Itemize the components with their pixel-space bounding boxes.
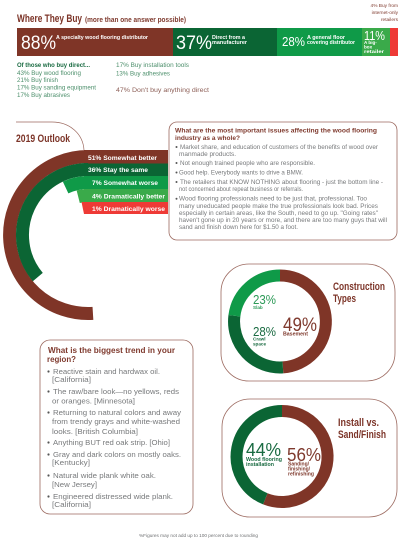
callout: 4% internet-only retailers xyxy=(371,3,399,23)
text block: trend list: Returning to natural colors and away xyxy=(53,408,181,417)
arc and label: 36% stay the same: 36% Stay the same xyxy=(88,167,148,174)
panel: biggest trend in your region xyxy=(40,340,193,514)
text block: trend list: Reactive stain and hardwax oil. xyxy=(53,367,160,376)
segment: 37% direct from manufacturer xyxy=(173,28,277,56)
heading: construction types: Types xyxy=(333,293,356,305)
stacked bar: where they buy xyxy=(17,28,398,56)
segment: 28% general floor covering distributor: A general floor xyxy=(307,35,345,41)
heading: issues question: industry as a whole? xyxy=(175,135,240,142)
segment: 37% direct from manufacturer: 37% xyxy=(176,33,212,54)
text block: of those who buy direct: 17% Buy abrasives xyxy=(17,93,70,99)
label: 56% sanding/finishing/refinishing xyxy=(287,445,321,478)
heading: install vs sand/finish: Sand/Finish xyxy=(338,429,386,441)
heading: issues question xyxy=(175,128,377,142)
label: 28% crawl space xyxy=(253,324,276,346)
arc and label: 4% dramatically better: 4% Dramatically better xyxy=(92,194,165,200)
heading: trend question: What is the biggest trend in your xyxy=(48,346,175,355)
segment: 11% big-box retailer: A big- xyxy=(364,40,377,45)
text block: issues list: manmade products. xyxy=(179,152,236,158)
text block: issues list: The retailers that KNOW NOTHING about flooring - just the bottom line - xyxy=(180,180,383,186)
text block: trend list: Gray and dark colors on mostly oaks. xyxy=(53,450,181,459)
text block: trend list: or oranges. [Minnesota] xyxy=(52,396,135,406)
arc and label: 1% dramatically worse: 1% Dramatically worse xyxy=(92,206,165,213)
title: where they buy: (more than one answer possible) xyxy=(85,15,186,24)
segment: 28% general floor covering distributor xyxy=(277,28,362,56)
label: 56% sanding/finishing/refinishing: Sanding/ xyxy=(288,462,310,468)
text block: trend list: from trendy grays and white-washed xyxy=(52,417,180,426)
segment: 11% big-box retailer: box xyxy=(364,44,373,50)
title: where they buy: Where They Buy xyxy=(17,13,83,25)
panel: install vs sand/finish xyxy=(222,399,397,517)
heading: install vs sand/finish: Install vs. xyxy=(338,417,379,429)
arc and label: 4% dramatically better xyxy=(78,189,168,202)
text block: of those who buy direct: 13% Buy adhesives xyxy=(116,72,170,78)
arc and label: 51% somewhat better xyxy=(10,150,168,313)
panel: most important issues xyxy=(169,122,397,240)
text block: trend list: [New Jersey] xyxy=(52,480,97,489)
arc and label: 51% somewhat better: 51% Somewhat better xyxy=(88,155,157,162)
text block: of those who buy direct: Of those who buy direct... xyxy=(17,63,90,69)
donut chart: install vs sand/finish xyxy=(237,411,328,502)
text block: issues list: Wood flooring professionals need to be just that, professional. Too xyxy=(179,197,368,203)
text: 47% don't buy direct: 47% Don't buy anything direct xyxy=(116,88,209,94)
segment: 11% big-box retailer xyxy=(362,28,390,56)
text block: issues list: Market share, and education of customers of the benefits of wood over xyxy=(180,145,378,151)
segment: 28% general floor covering distributor: 28% xyxy=(282,34,305,49)
segment: 11% big-box retailer: 11% xyxy=(364,28,385,43)
arc and label: 1% dramatically worse xyxy=(82,202,168,214)
text block: issues list: not concerned about repeat business or referrals. xyxy=(179,187,303,193)
segment: 37% direct from manufacturer: Direct from a xyxy=(212,35,245,41)
heading: issues question: What are the most important issues affecting the wood flooring xyxy=(175,128,377,134)
text block: issues list: Good help. Everybody wants to drive a BMW. xyxy=(179,170,303,176)
panel: construction types xyxy=(221,264,395,381)
callout: 4% internet-only retailers: retailers xyxy=(381,17,399,23)
segment: 28% general floor covering distributor: covering distributor xyxy=(307,40,355,46)
text block: issues list: haven't gone up in 20 years or more, and there are too many guys that will xyxy=(179,218,387,224)
text block: issues list: especially in certain areas, like the South, need to go up. "Going rates" xyxy=(179,211,378,217)
text block: trend list: Natural wide plank white oak. xyxy=(53,471,156,480)
label: 23% slab: 23% xyxy=(253,292,276,307)
footnote: %Figures may not add up to 100 percent due to rounding xyxy=(139,533,259,538)
arc and label: 7% somewhat worse: 7% Somewhat worse xyxy=(92,180,158,187)
text block: trend list: [California] xyxy=(52,375,91,384)
segment: 37% direct from manufacturer: manufacturer xyxy=(212,40,247,46)
heading: 2019 outlook xyxy=(16,122,84,150)
text block: of those who buy direct: 17% Buy sanding equipment xyxy=(17,86,96,92)
text block: trend list: Anything BUT red oak strip. [Ohio] xyxy=(53,438,170,447)
text block: issues list: many uneducated people make the true professionals look bad. Prices xyxy=(179,204,378,210)
text block: issues list: sand and finish down here for $1.50 a foot. xyxy=(179,225,298,231)
label: 49% basement: Basement xyxy=(283,332,308,338)
text block: trend list xyxy=(47,367,181,509)
text block: trend list: Engineered distressed wide plank. xyxy=(53,492,173,501)
label: 44% wood flooring installation: Wood flooring xyxy=(246,457,282,463)
segment: 11% big-box retailer: retailer xyxy=(364,49,384,54)
heading: 2019 outlook: 2019 Outlook xyxy=(16,133,71,145)
callout: 4% internet-only retailers: 4% Buy from xyxy=(371,3,398,9)
label: 56% sanding/finishing/refinishing: 56% xyxy=(287,445,321,465)
heading: trend question xyxy=(47,346,175,364)
heading: construction types xyxy=(333,281,385,305)
label: 23% slab: Slab xyxy=(253,305,263,310)
text block: trend list: [California] xyxy=(52,500,91,509)
label: 28% crawl space: 28% xyxy=(253,324,276,339)
text block: of those who buy direct: 17% Buy installation tools xyxy=(116,63,189,69)
label: 49% basement: 49% xyxy=(283,315,317,336)
callout: 4% internet-only retailers: internet-only xyxy=(372,10,399,16)
donut chart: construction types xyxy=(234,276,326,367)
text block: trend list: looks. [British Columbia] xyxy=(52,427,138,436)
arc and label: 7% somewhat worse xyxy=(66,176,168,189)
text block: issues list xyxy=(176,145,387,231)
segment: 88% specialty distributor: A specialty wood flooring distributor xyxy=(56,35,148,41)
heading: install vs sand/finish xyxy=(338,417,386,441)
text block: trend list: The raw/bare look—no yellows, reds xyxy=(53,387,179,396)
heading: construction types: Construction xyxy=(333,281,385,293)
segment: 88% specialty distributor xyxy=(17,28,173,56)
label: 28% crawl space: space xyxy=(253,342,266,346)
text block: of those who buy direct: 21% Buy finish xyxy=(17,78,58,84)
text block: issues list: Not enough trained people who are responsible. xyxy=(180,161,315,167)
arc and label: 36% stay the same xyxy=(22,164,168,277)
text block: of those who buy direct: 43% Buy wood flooring xyxy=(17,71,81,77)
label: 44% wood flooring installation: installation xyxy=(246,462,274,468)
title: where they buy xyxy=(17,13,186,25)
text block: trend list: [Kentucky] xyxy=(52,458,90,467)
heading: trend question: region? xyxy=(47,355,76,364)
text block: of those who buy direct xyxy=(17,63,189,99)
label: 28% crawl space: Crawl xyxy=(253,336,266,342)
radial bar chart: 2019 outlook xyxy=(10,150,168,313)
label: 44% wood flooring installation: 44% xyxy=(246,440,281,460)
label: 56% sanding/finishing/refinishing: finishing/ xyxy=(288,466,311,472)
label: 56% sanding/finishing/refinishing: refinishing xyxy=(288,472,314,478)
segment: 4% internet-only xyxy=(390,28,398,56)
segment: 88% specialty distributor: 88% xyxy=(21,33,56,54)
